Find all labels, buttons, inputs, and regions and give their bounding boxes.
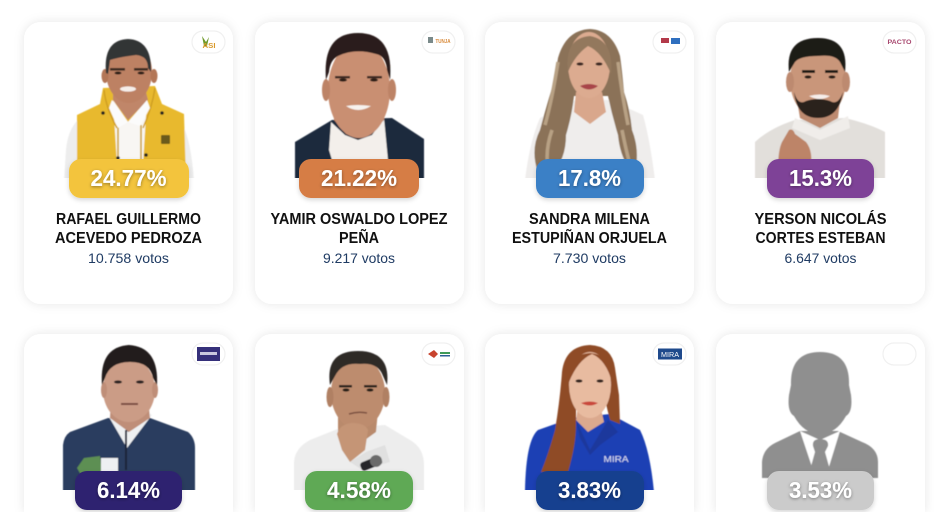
portrait: grey placeholder silhouette [762, 352, 878, 478]
party badge [192, 31, 225, 53]
candidate name: CORTES ESTEBAN [756, 230, 886, 247]
panel: candidate Yamir Oswaldo Lopez Peña [255, 22, 464, 304]
empty party badge [883, 343, 916, 365]
vote count: 6.647 votos [784, 250, 856, 266]
candidate name [55, 211, 202, 247]
percentage pill: 4.58% [327, 477, 391, 503]
percentage pill [69, 159, 189, 198]
party badge [653, 31, 686, 53]
percentage pill: 21.22% [321, 165, 397, 191]
candidate name: YERSON NICOLÁS [754, 209, 887, 228]
candidate name: RAFAEL GUILLERMO [56, 211, 201, 228]
percentage pill: 15.3% [789, 165, 852, 191]
candidate name: PEÑA [339, 227, 379, 247]
percentage pill: 6.14% [97, 477, 160, 503]
candidate name [512, 211, 667, 247]
percentage pill [767, 159, 874, 198]
portrait: Yerson with finger heart [755, 38, 885, 180]
candidate name [270, 211, 448, 247]
party badge: TUNJA [436, 39, 451, 45]
portrait: woman in blue shirt [525, 345, 654, 492]
party badge [883, 31, 916, 53]
percentage pill: 24.77% [90, 165, 167, 191]
percentage pill [536, 159, 644, 198]
percentage pill: 17.8% [558, 165, 621, 191]
vote count: 10.758 votos [88, 250, 169, 266]
percentage pill [299, 159, 419, 198]
percentage pill: 3.53% [789, 477, 852, 503]
percentage pill [305, 471, 413, 510]
panel: candidate Sandra Milena Estupiñan Orjuela [485, 22, 694, 304]
panel: candidate with 3.83% [485, 334, 694, 512]
party badge: PACTO [888, 39, 912, 46]
portrait: man with hand on chin [294, 351, 424, 492]
percentage pill [75, 471, 182, 510]
portrait: Yamir in dark jacket [295, 33, 424, 180]
candidate name: ESTUPIÑAN ORJUELA [512, 227, 667, 247]
candidate name: SANDRA MILENA [529, 211, 650, 228]
vote count: 9.217 votos [323, 250, 395, 266]
portrait: Sandra with long wavy hair [525, 29, 655, 180]
panel: candidate Rafael Guillermo Acevedo Pedroza [24, 22, 233, 304]
portrait: man in navy jacket [63, 345, 195, 492]
percentage pill [536, 471, 644, 510]
party badge [422, 343, 455, 365]
candidate name: YAMIR OSWALDO LOPEZ [270, 211, 448, 228]
portrait: Rafael in yellow vest [64, 39, 194, 180]
party badge [653, 343, 686, 365]
panel: candidate with 6.14% [24, 334, 233, 512]
party badge [192, 343, 225, 365]
panel: candidate with 3.53% [716, 334, 925, 512]
panel: candidate Yerson Nicolás Cortes Esteban [716, 22, 925, 304]
panel: candidate with 4.58% [255, 334, 464, 512]
percentage pill: 3.83% [558, 477, 621, 503]
percentage pill [767, 471, 874, 510]
party badge: ASI [202, 43, 216, 50]
portrait: woman in blue shirt: MIRA [604, 455, 629, 464]
candidate name: ACEVEDO PEDROZA [55, 230, 202, 247]
candidate name [754, 209, 887, 247]
vote count: 7.730 votos [553, 250, 626, 266]
party badge [422, 31, 455, 53]
party badge: MIRA [661, 352, 679, 359]
